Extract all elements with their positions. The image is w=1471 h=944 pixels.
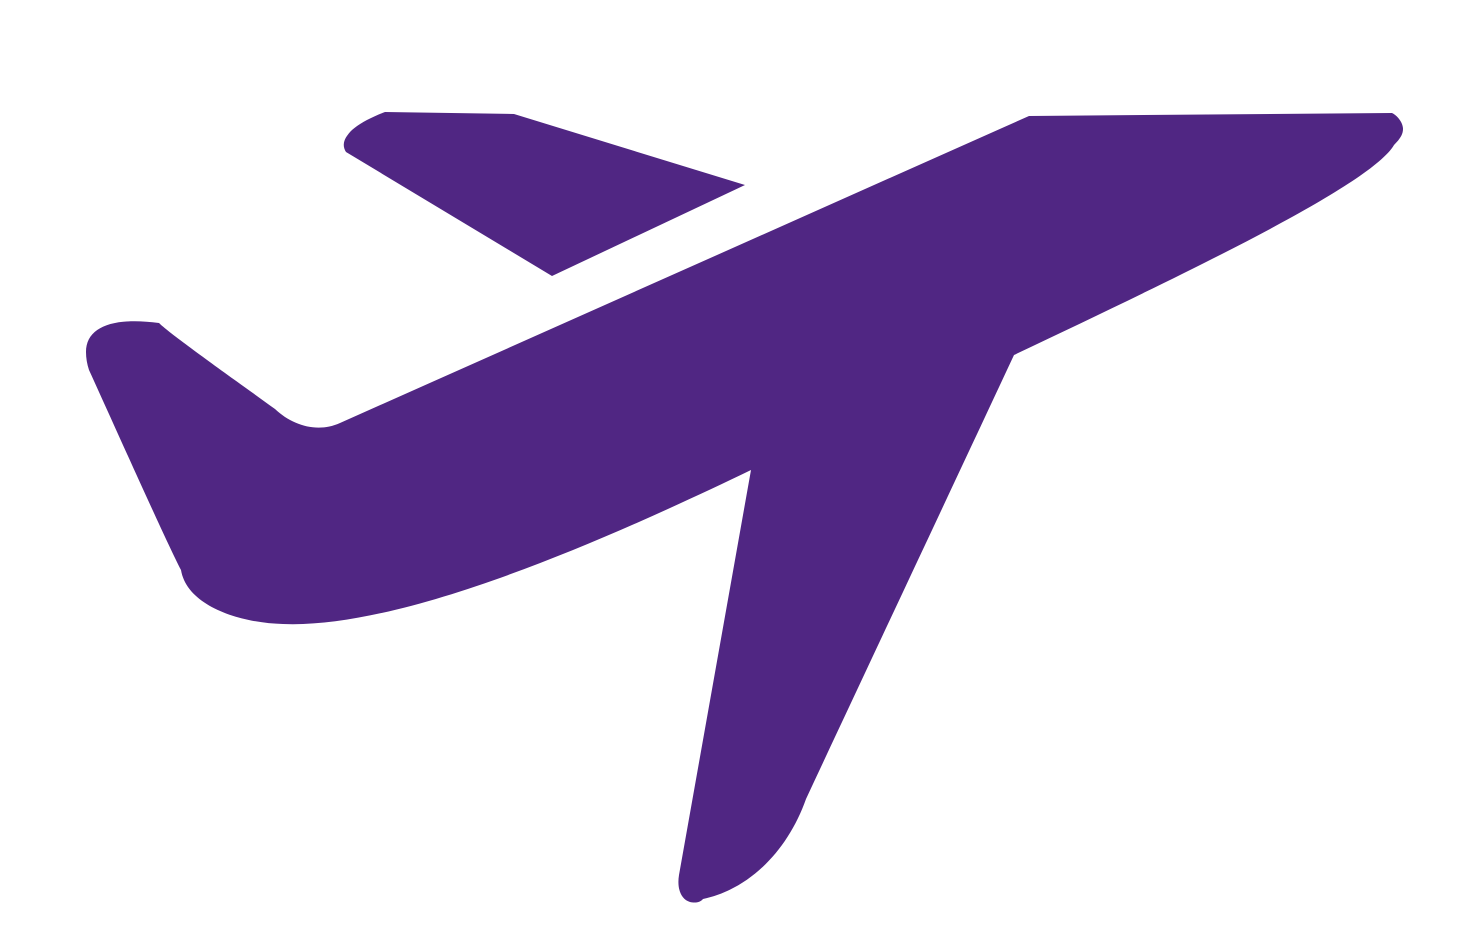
- icon: airplane far wing: [344, 112, 745, 276]
- icon: airplane fuselage and near wing: [86, 113, 1403, 903]
